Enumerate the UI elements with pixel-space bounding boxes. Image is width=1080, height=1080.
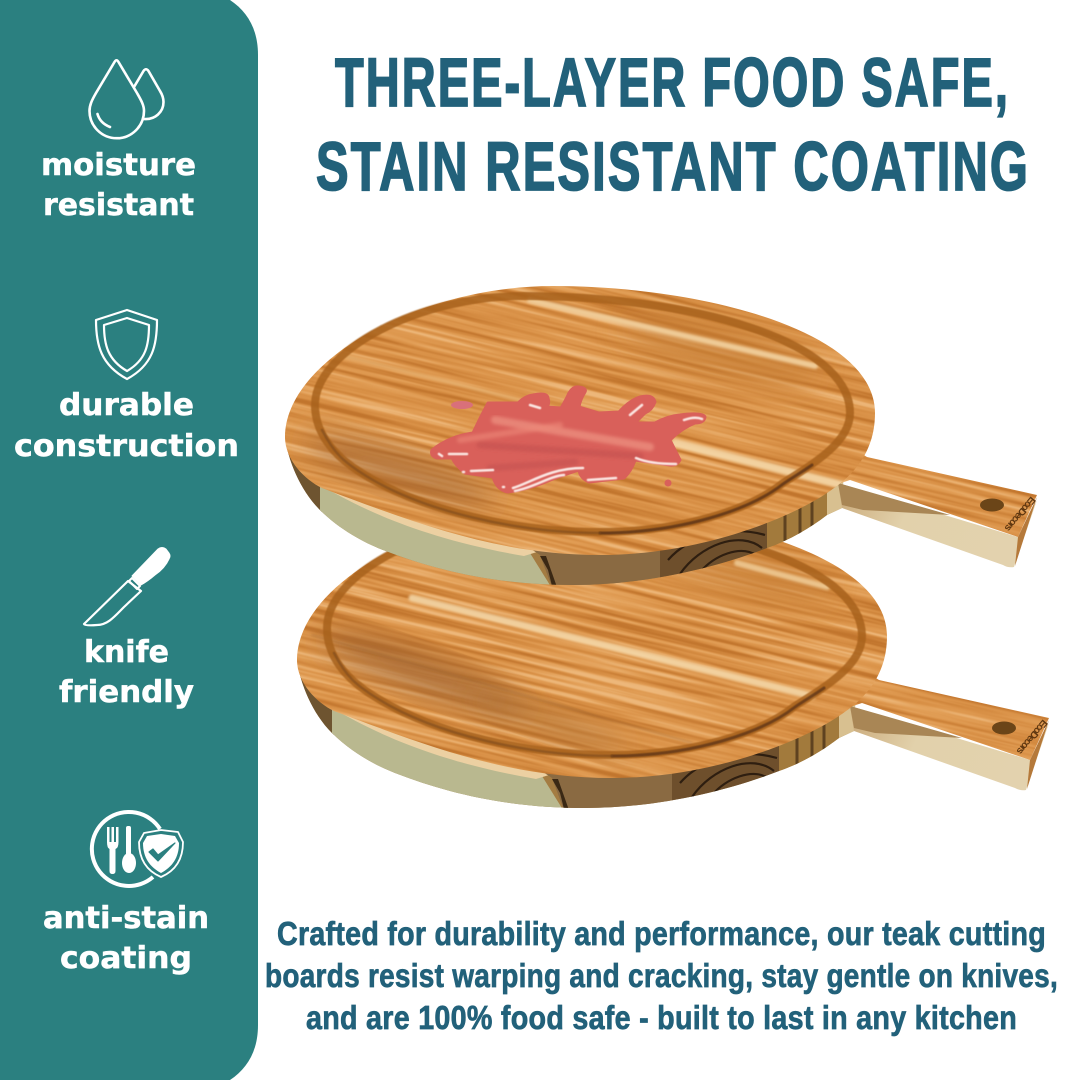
feature: knife friendly [59,548,194,710]
board top face [297,542,887,778]
handle: EcoDecors [1001,494,1037,534]
feature: durable construction [14,310,239,464]
wood grain streaks [312,521,836,764]
title [316,44,1030,205]
red stain splash [432,387,705,492]
juice groove [315,296,850,533]
handle [838,456,1037,568]
feature: moisture resistant [41,60,196,223]
board top face [285,286,875,555]
panel: left teal feature sidebar [0,0,258,1080]
label: moisture resistant: resistant [43,188,194,223]
juice groove [327,519,862,756]
upper teak cutting board [285,286,1037,585]
lower teak cutting board [297,542,1049,808]
icon: shield [96,310,157,379]
handle: EcoDecors [1013,717,1049,757]
label: knife friendly: knife [84,635,169,670]
label: durable construction: durable [59,388,194,423]
label: anti-stain coating: anti-stain [43,901,209,936]
board rim side [297,660,856,808]
label: durable construction: construction [14,429,239,464]
feature: anti-stain coating [43,812,209,976]
wood grain streaks [299,300,850,520]
icon: cutlery plate with shield [92,812,183,886]
board rim side [285,438,844,585]
label: anti-stain coating: coating [60,941,192,976]
icon: knife [84,548,170,625]
body text [265,915,1058,1036]
label: knife friendly: friendly [59,675,194,710]
handle [850,678,1049,790]
label: moisture resistant: moisture [41,148,196,183]
icon: water drops [90,60,164,138]
